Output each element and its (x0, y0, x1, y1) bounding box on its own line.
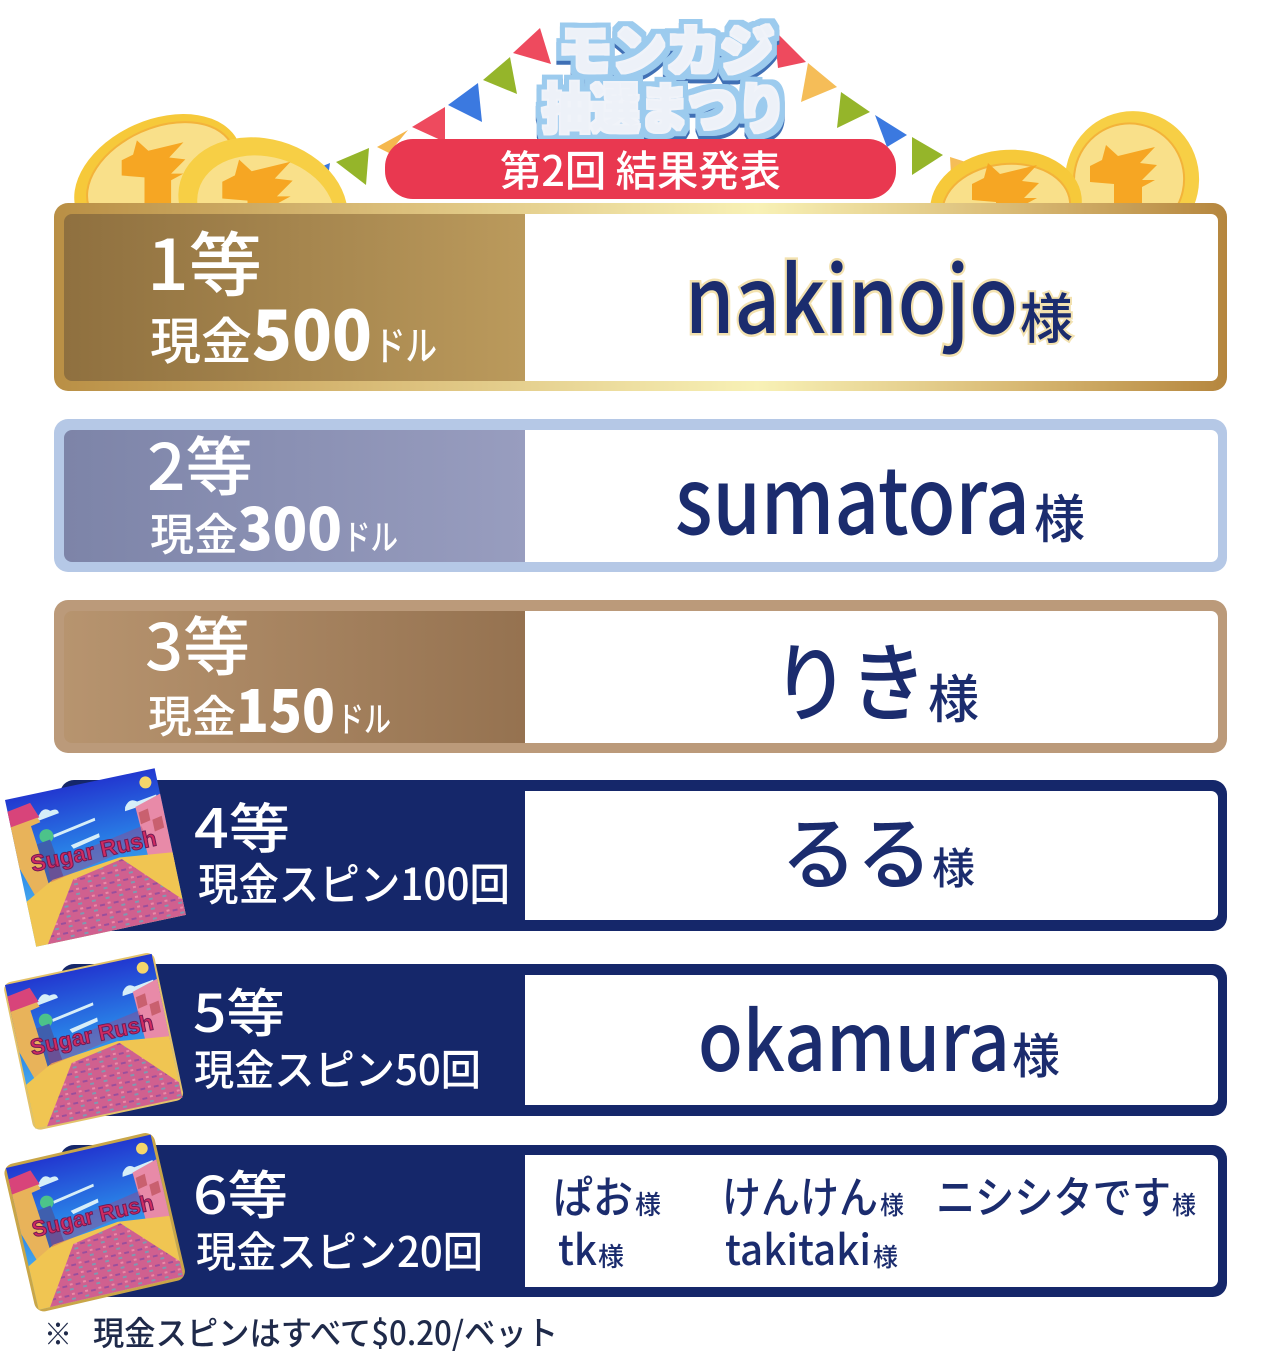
winner 5: okamura (698, 976, 1010, 1095)
winner 1: nakinojo (685, 227, 1018, 360)
row 3 (54, 597, 1227, 753)
row 4 (5, 768, 1227, 947)
game card 6: Sugar Rush (29, 1190, 156, 1242)
prize 1: 500 (252, 281, 372, 380)
prize 2: 300 (238, 483, 342, 567)
game card 4 (5, 768, 186, 947)
winners 6: ぱお (553, 1162, 633, 1226)
footnote: 現金スピンはすべて$0.20/ベット (93, 1307, 558, 1355)
winner 3: 様 (928, 658, 979, 733)
prize 3: 現金 (148, 681, 236, 745)
logo: モンカジ抽選まつり: モンカジ (558, 7, 774, 86)
prize 1: 現金 (150, 302, 252, 374)
winners 6: 様 (598, 1237, 624, 1274)
title pill (385, 138, 896, 199)
prize 4: 現金スピン100回 (198, 849, 510, 913)
winner 2: sumatora (675, 428, 1030, 561)
game card 6 (3, 1131, 187, 1313)
row 5 (3, 952, 1227, 1131)
winner 3: りき (772, 614, 927, 739)
winners 6 (553, 1162, 1196, 1278)
row 1 (54, 203, 1227, 391)
winners 6: 様 (880, 1186, 904, 1222)
rank 5: 5等 (193, 972, 285, 1047)
winner 5: 様 (1012, 1017, 1060, 1087)
row 6 (3, 1131, 1227, 1313)
row 2 (54, 417, 1227, 572)
prize 1: ドル (374, 314, 437, 372)
winners 6: ニシシタです (936, 1162, 1171, 1226)
winner 1: 様 (1020, 275, 1073, 354)
coins left (74, 114, 346, 203)
winner 2: 様 (1034, 478, 1085, 553)
title text: 第2回 結果発表 (500, 138, 781, 199)
logo: モンカジ抽選まつり (542, 7, 786, 144)
rank 4: 4等 (194, 785, 290, 864)
logo: モンカジ抽選まつり: 抽選まつり (542, 65, 786, 144)
game card 5 (3, 952, 185, 1131)
winners 6: 様 (635, 1185, 661, 1222)
winners 6: 様 (1172, 1186, 1196, 1222)
game card 4: Sugar Rush (28, 825, 159, 877)
prize 6: 現金スピン20回 (196, 1219, 483, 1280)
prize 1 (150, 281, 437, 380)
winner 4: 様 (932, 835, 975, 897)
winners 6: 様 (873, 1238, 898, 1274)
coins right (930, 111, 1200, 203)
footnote: ※ (44, 1310, 72, 1354)
rank 1: 1等 (147, 210, 262, 311)
winner 4: るる (781, 791, 932, 907)
rank 6: 6等 (193, 1154, 288, 1229)
prize 3 (148, 665, 391, 749)
prize 3: 150 (236, 665, 335, 749)
prize 2: ドル (343, 510, 398, 561)
game card 5: Sugar Rush (28, 1010, 156, 1060)
prize 2: 現金 (150, 499, 238, 563)
prize 2 (150, 483, 398, 567)
winners 6: けんけん (722, 1162, 878, 1226)
rank 2: 2等 (147, 417, 253, 509)
rank 3: 3等 (145, 597, 250, 689)
header bunting flags (318, 28, 969, 185)
prize 3: ドル (337, 692, 391, 743)
winners 6: takitaki (725, 1217, 871, 1278)
winners 6: tk (558, 1217, 597, 1278)
prize 5: 現金スピン50回 (194, 1037, 481, 1098)
